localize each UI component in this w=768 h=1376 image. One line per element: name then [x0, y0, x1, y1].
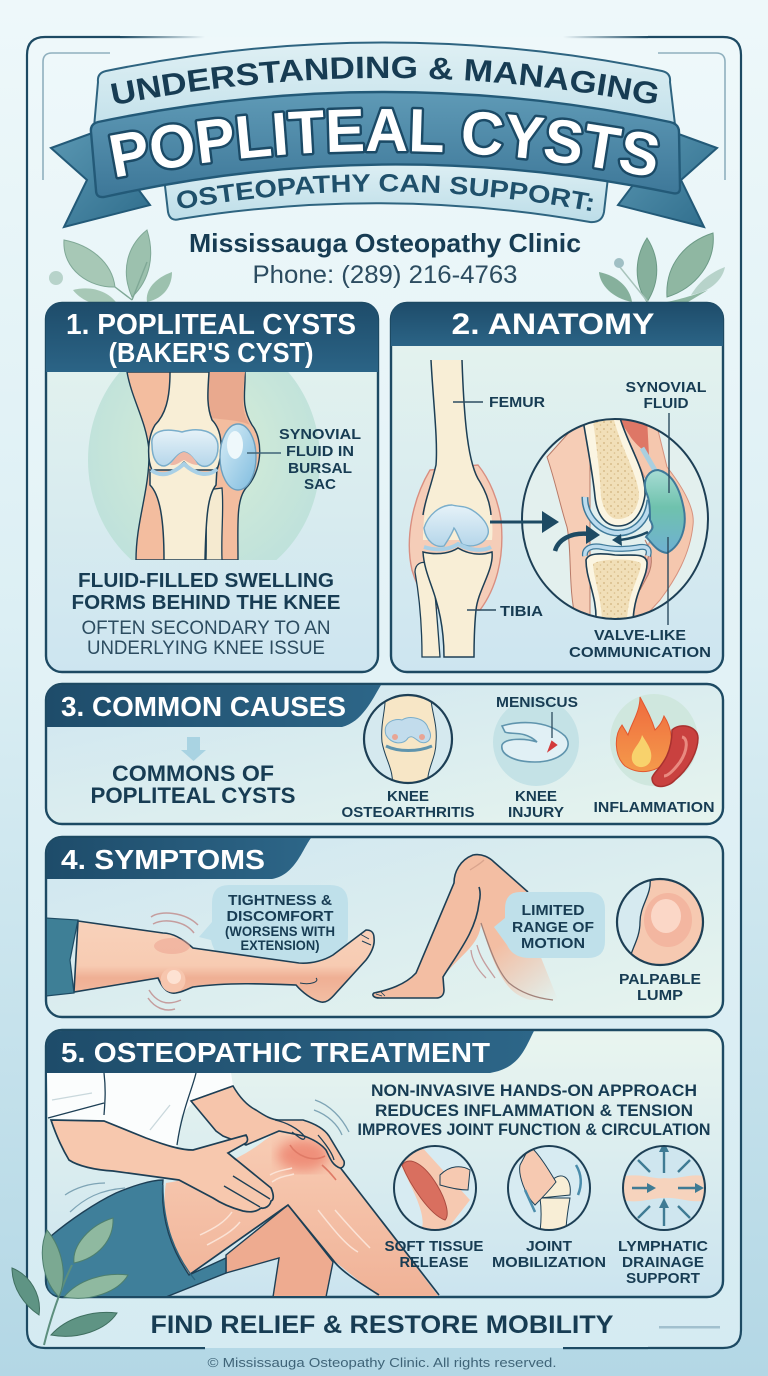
- cyst: [220, 424, 256, 490]
- shorts: [46, 1180, 226, 1297]
- muscle: [622, 420, 649, 455]
- treatment benefits: REDUCES INFLAMMATION & TENSION: [375, 1101, 693, 1120]
- panel 4 heading: 4. SYMPTOMS: [61, 844, 265, 875]
- panel 1 heading: (BAKER'S CYST): [108, 337, 314, 368]
- panel 1 description: FORMS BEHIND THE KNEE: [72, 592, 340, 614]
- icon: palpable lump: PALPABLE: [619, 971, 701, 988]
- panel 2 heading: 2. ANATOMY: [452, 308, 654, 341]
- panel 4: symptoms: [46, 837, 723, 1017]
- panel 1 description: OFTEN SECONDARY TO AN: [82, 618, 330, 639]
- icon: soft tissue release: RELEASE: [400, 1254, 468, 1271]
- redness on knee: [277, 1139, 329, 1171]
- clinic name: Mississauga Osteopathy Clinic: [189, 228, 581, 258]
- soft tissue left: [547, 418, 590, 620]
- valve-like communication label: COMMUNICATION: [569, 644, 711, 661]
- panel 1 description: UNDERLYING KNEE ISSUE: [87, 638, 325, 659]
- thigh and shin: [164, 1129, 439, 1297]
- main banner: POPLITEAL CYSTS: [108, 106, 660, 180]
- fold near cyst: [640, 540, 651, 590]
- panel 3 heading: [47, 685, 381, 727]
- flow arrow small: [620, 532, 648, 540]
- icon: joint mobilization: JOINT: [526, 1238, 572, 1255]
- cyst label: SYNOVIAL: [279, 426, 361, 443]
- illustration: knee with cyst: [88, 372, 320, 560]
- panel 3 subheading: [90, 761, 296, 808]
- left arm and hand: [51, 1120, 273, 1212]
- panel 1 heading: [46, 303, 378, 372]
- treatment benefits: NON-INVASIVE HANDS-ON APPROACH: [371, 1081, 697, 1100]
- speech bubble: limited range: MOTION: [521, 935, 585, 952]
- panel 3 subheading: POPLITEAL CYSTS: [90, 783, 296, 808]
- speech bubble: limited range: [494, 892, 605, 958]
- ribbon: top subtitle: UNDERSTANDING & MANAGING: [110, 56, 658, 104]
- illustration: knee anatomy: [409, 360, 502, 657]
- femur label: [453, 394, 545, 411]
- panel 2 heading: [391, 303, 723, 346]
- leaves: top right: [599, 233, 725, 303]
- icon: palpable lump: LUMP: [637, 987, 683, 1004]
- icon: joint mobilization: MOBILIZATION: [492, 1254, 606, 1271]
- icon: knee injury: INJURY: [508, 804, 564, 821]
- synovial fluid label: [626, 379, 706, 493]
- leaves: bottom left: [12, 1218, 128, 1345]
- panel 5 heading: 5. OSTEOPATHIC TREATMENT: [61, 1037, 490, 1068]
- speech bubble: tightness: (WORSENS WITH: [225, 924, 335, 939]
- panel 3: common causes: [46, 684, 723, 824]
- panel 5: osteopathic treatment: [46, 1030, 723, 1297]
- icon: lymphatic drainage support: [618, 1142, 708, 1287]
- femur label: FEMUR: [489, 394, 545, 411]
- synovial fluid label: SYNOVIAL: [626, 379, 706, 396]
- icon: lymphatic drainage support: DRAINAGE: [622, 1254, 704, 1271]
- phone number: Phone: (289) 216-4763: [252, 261, 518, 289]
- speech bubble: limited range: LIMITED: [522, 902, 585, 919]
- speech bubble: limited range: RANGE OF: [512, 919, 594, 936]
- icon: knee injury: KNEE: [515, 788, 557, 805]
- lower bone: [585, 546, 649, 556]
- icon: soft tissue release: [384, 1145, 484, 1271]
- cyst label: SAC: [304, 476, 336, 493]
- icon: soft tissue release: SOFT TISSUE: [384, 1238, 484, 1255]
- motion lines: [65, 1183, 125, 1212]
- cyst label: BURSAL: [288, 460, 352, 477]
- ribbon tail right: [618, 132, 717, 227]
- skin highlights: [200, 1168, 370, 1252]
- closing tagline: FIND RELIEF & RESTORE MOBILITY: [150, 1311, 614, 1339]
- icon: joint mobilization: [492, 1146, 606, 1271]
- panel 1 heading: 1. POPLITEAL CYSTS: [66, 309, 356, 341]
- speech bubble: tightness: TIGHTNESS &: [228, 892, 332, 909]
- treatment benefits: [358, 1081, 710, 1139]
- far lower leg: [226, 1205, 333, 1297]
- panel 5 heading: [47, 1031, 534, 1073]
- illustration: hands on knee: [46, 1073, 439, 1297]
- upper bone: [585, 497, 650, 533]
- title banner: [49, 42, 719, 228]
- motion lines near knee: [314, 1100, 349, 1135]
- synovial fluid label: FLUID: [644, 395, 689, 412]
- illustration: extended leg: [46, 913, 374, 1010]
- cyst label: FLUID IN: [286, 443, 354, 460]
- shirt: [47, 1073, 233, 1148]
- speech bubble: tightness: DISCOMFORT: [226, 908, 334, 925]
- cyst label: [247, 426, 361, 493]
- tibia label: [467, 603, 543, 620]
- icon: knee injury: MENISCUS: [496, 694, 578, 711]
- speech bubble: tightness: [199, 885, 348, 962]
- icon: lymphatic drainage support: LYMPHATIC: [618, 1238, 708, 1255]
- panel 2: anatomy: [391, 303, 723, 672]
- right arm and hand: [191, 1086, 344, 1168]
- leaves: top left: [49, 230, 172, 306]
- panel 3 heading: 3. COMMON CAUSES: [61, 691, 346, 722]
- panel 3 subheading: COMMONS OF: [112, 761, 274, 786]
- flow arrow curved: [555, 534, 590, 551]
- valve-like communication label: [569, 537, 711, 661]
- ribbon: lower subtitle: OSTEOPATHY CAN SUPPORT:: [177, 174, 593, 212]
- treatment benefits: IMPROVES JOINT FUNCTION & CIRCULATION: [358, 1120, 710, 1139]
- panel 4 heading: [47, 838, 311, 879]
- valve-like communication label: VALVE-LIKE: [594, 627, 686, 644]
- ribbon tail left: [51, 132, 150, 227]
- icon: inflammation: INFLAMMATION: [594, 799, 714, 816]
- panel 1: popliteal cysts: [46, 303, 378, 672]
- icon: knee osteoarthritis: KNEE: [387, 788, 429, 805]
- icon: knee injury: [493, 694, 579, 821]
- cyst: [645, 470, 685, 553]
- arrow to detail: [490, 511, 559, 533]
- detail circle: [522, 418, 708, 622]
- icon: lymphatic drainage support: SUPPORT: [626, 1270, 700, 1287]
- speech bubble: tightness: EXTENSION): [240, 938, 320, 953]
- copyright: © Mississauga Osteopathy Clinic. All rights reserved.: [208, 1355, 556, 1370]
- illustration: bent leg: [373, 855, 558, 1000]
- panel 1 description: [72, 570, 340, 659]
- icon: inflammation: [594, 694, 714, 816]
- icon: palpable lump: [617, 878, 705, 1004]
- down arrow: [181, 737, 206, 761]
- icon: knee osteoarthritis: OSTEOARTHRITIS: [342, 804, 474, 821]
- icon: knee osteoarthritis: [342, 690, 474, 821]
- soft tissue right: [624, 426, 694, 616]
- tibia label: TIBIA: [500, 603, 543, 620]
- panel 1 description: FLUID-FILLED SWELLING: [78, 570, 334, 592]
